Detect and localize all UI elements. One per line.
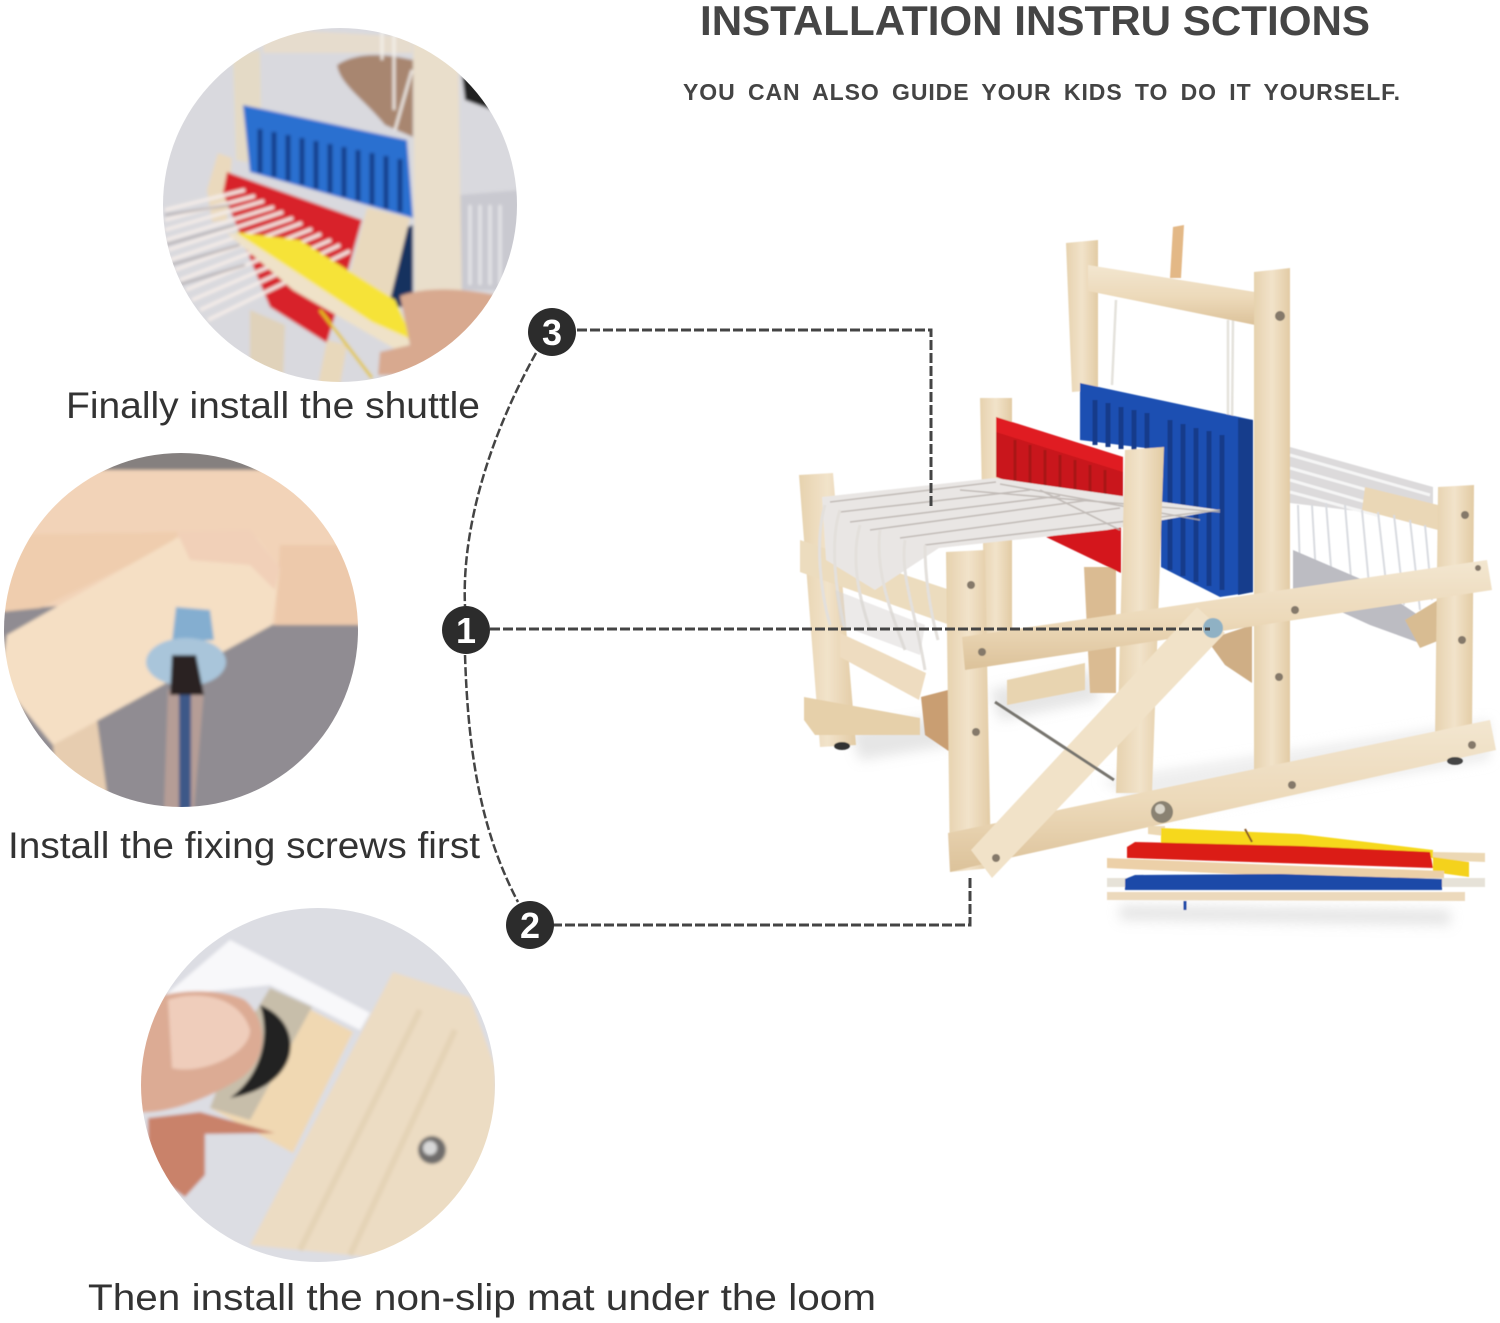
photo circle: fixing screws bbox=[0, 448, 365, 815]
badge 2 bbox=[506, 901, 554, 949]
badge 3: 3 bbox=[542, 312, 562, 353]
back frame with peg bbox=[1066, 225, 1440, 683]
middle post bbox=[1116, 447, 1164, 793]
subtitle: YOU CAN ALSO GUIDE YOUR KIDS TO DO IT YOURSELF. bbox=[683, 79, 1400, 105]
blue heddle bbox=[1080, 383, 1253, 597]
red beater bbox=[996, 417, 1123, 573]
badge 1 bbox=[442, 606, 490, 654]
badge 1: 1 bbox=[456, 610, 476, 651]
floor shadows bbox=[850, 670, 1490, 925]
warp threads bbox=[820, 478, 1220, 670]
shuttles bbox=[1107, 826, 1485, 910]
badge 2: 2 bbox=[520, 905, 540, 946]
caption: shuttle: Finally install the shuttle bbox=[66, 385, 480, 426]
left back frame bbox=[799, 398, 1116, 752]
loom illustration bbox=[799, 225, 1496, 925]
caption: screws: Install the fixing screws first bbox=[8, 825, 481, 866]
badge 3 bbox=[528, 308, 576, 356]
front frame bbox=[834, 268, 1496, 878]
dashed connector: step 3 bbox=[577, 330, 931, 508]
dashed connector: step 2 bbox=[552, 875, 970, 925]
photo circle: non-slip mat bbox=[135, 900, 505, 1270]
dashed connector: step 1 bbox=[490, 628, 1210, 630]
dashed arc joining the steps bbox=[465, 353, 536, 902]
caption: mat: Then install the non-slip mat under the loom bbox=[88, 1277, 876, 1318]
photo circle: install the shuttle bbox=[163, 28, 517, 382]
